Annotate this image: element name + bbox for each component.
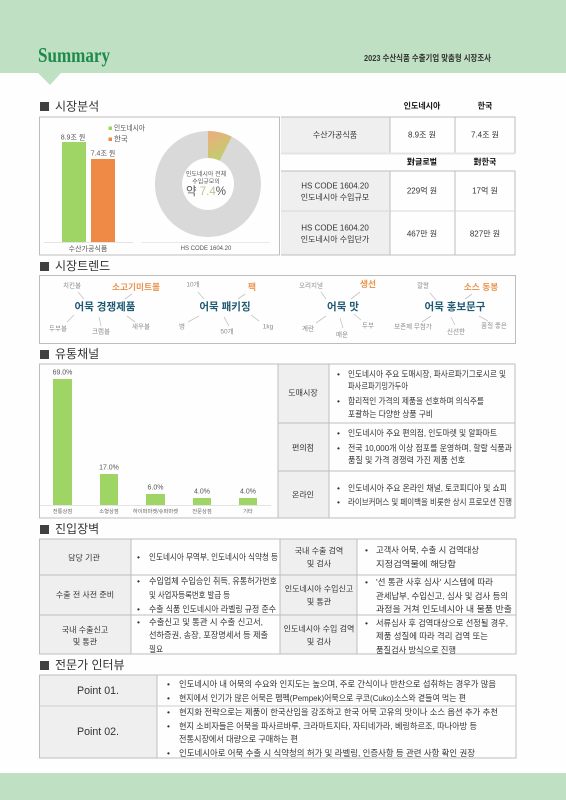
- table: market size: 對한국: [474, 156, 497, 166]
- table: entry barriers: 및 검사: [307, 558, 332, 568]
- table: expert interview: •: [167, 721, 170, 731]
- table: expert interview: [40, 675, 516, 758]
- heading: expert interview: 전문가 인터뷰: [55, 658, 125, 672]
- table: market size: 8.9조 원: [408, 130, 436, 140]
- table: entry barriers: 제품 성질에 따라 격리 검역 또는: [376, 631, 488, 641]
- table: entry barriers: •: [137, 617, 140, 627]
- bar chart: distribution channels: 전문상점: [192, 507, 212, 515]
- table: market size: HS CODE 1604.20: [301, 182, 369, 190]
- table: entry barriers: 및 통관: [73, 636, 98, 646]
- table: entry barriers: 인도네시아 수입신고: [285, 584, 353, 594]
- keyword cluster: taste: [299, 278, 376, 338]
- table: distribution channels: 라이브커머스 및 페이백을 비롯한 상시 프로모션 진행: [348, 497, 512, 507]
- table: market size: 827만 원: [470, 230, 500, 238]
- keyword cluster: promotion phrases: 할랄: [417, 280, 429, 290]
- legend: [108, 122, 145, 144]
- keyword cluster: promotion phrases: 신선한: [447, 326, 465, 336]
- donut chart: 인도네시아 전체: [186, 170, 226, 178]
- table: expert interview: 현지 소비자들은 어묵을 파사르바루, 크라마트지타, 자티네가라, 베링하르조, 따나아방 등: [179, 721, 477, 731]
- table: market size: 한국: [478, 100, 493, 110]
- table: market size: [281, 100, 515, 255]
- table: distribution channels: 품질 및 가격 경쟁력 가진 제품 선호: [348, 455, 465, 465]
- table: market size: 7.4조 원: [471, 130, 499, 140]
- table: entry barriers: 및 사업자등록번호 발급 등: [149, 590, 230, 600]
- table: expert interview: 인도네시아 내 어묵의 수요와 인지도는 높으며, 주로 간식이나 반찬으로 섭취하는 경우가 많음: [179, 679, 496, 689]
- panel: market size charts: [40, 117, 280, 255]
- bar chart: distribution channels: 하이퍼마켓/슈퍼마켓: [133, 507, 178, 515]
- table: entry barriers: '선 통관 사후 심사' 시스템에 따라: [376, 577, 493, 587]
- table: market size: 對글로벌: [407, 156, 437, 166]
- legend: 한국: [114, 134, 128, 144]
- table: distribution channels: 인도네시아 주요 온라인 채널, 토코피디아 및 쇼피: [348, 483, 507, 493]
- table: distribution channels: 전국 10,000개 이상 점포를 운영하며, 할랄 식품과: [348, 443, 512, 453]
- table: distribution channels: 포괄하는 다양한 상품 구비: [348, 409, 433, 419]
- keyword cluster: competing products: 두부볼: [49, 324, 67, 332]
- legend: 인도네시아: [114, 122, 145, 132]
- table: distribution channels: 인도네시아 주요 도매시장, 파사르파기그로시르 및: [348, 369, 506, 379]
- table: market size: 인도네시아 수입단가: [301, 234, 370, 244]
- table: entry barriers: •: [365, 618, 368, 628]
- table: market size: 17억 원: [472, 186, 498, 196]
- keyword cluster: promotion phrases: 품질 좋은: [481, 322, 507, 330]
- keyword cluster: competing products: 어묵 경쟁제품: [75, 300, 136, 313]
- table: distribution channels: •: [337, 443, 340, 453]
- table: distribution channels: 온라인: [292, 490, 314, 500]
- table: market size: 229억 원: [407, 186, 437, 196]
- table: entry barriers: [40, 539, 516, 655]
- table: entry barriers: •: [137, 604, 140, 614]
- table: entry barriers: •: [365, 545, 368, 555]
- table: entry barriers: 필요: [149, 644, 163, 654]
- table: expert interview: Point 02.: [77, 726, 119, 738]
- keyword cluster: taste: 오리지널: [299, 280, 323, 290]
- donut chart: 약 7.4%: [186, 184, 226, 198]
- table: entry barriers: 과정을 거쳐 인도네시아 내 물품 반출: [376, 604, 512, 614]
- bar chart: distribution channels: 4.0%: [240, 488, 256, 496]
- table: market size: 인도네시아 수입규모: [301, 192, 369, 202]
- header band: [0, 0, 566, 85]
- bar chart: processed seafood: 수산가공식품: [69, 244, 108, 253]
- keyword cluster: packaging: 50개: [220, 326, 234, 336]
- table: market size: HS CODE 1604.20: [301, 224, 369, 232]
- keyword cluster: taste: 생선: [360, 278, 376, 289]
- bar chart: processed seafood: 8.9조 원: [61, 132, 85, 142]
- bar chart: distribution channels: 4.0%: [194, 488, 210, 496]
- keyword cluster: packaging: 10개: [186, 280, 200, 288]
- title: Summary: [38, 43, 110, 67]
- table: entry barriers: •: [137, 552, 140, 562]
- table: entry barriers: 지정검역물에 해당함: [376, 559, 456, 569]
- heading: market trends: 시장트렌드: [55, 259, 110, 273]
- keyword cluster: competing products: [49, 280, 160, 336]
- bar chart: distribution channels: 6.0%: [148, 484, 163, 492]
- table: entry barriers: 수출 전 사전 준비: [56, 590, 114, 600]
- table: expert interview: Point 01.: [77, 685, 119, 697]
- table: entry barriers: 국내 수출 검역: [295, 546, 343, 556]
- keyword cluster: promotion phrases: [394, 280, 507, 336]
- table: expert interview: •: [167, 679, 170, 689]
- keyword cluster: competing products: 치킨볼: [63, 280, 81, 290]
- table: expert interview: 현지화 전략으로는 제품이 한국산임을 강조하고 한국 어묵 고유의 맛이나 소스 옵션 추가 추천: [179, 707, 498, 717]
- table: entry barriers: 및 통관: [307, 596, 332, 606]
- donut chart: HS CODE 1604.20: [181, 246, 232, 252]
- heading: market analysis: 시장분석: [55, 100, 99, 114]
- table: distribution channels: 편의점: [292, 442, 314, 452]
- table: expert interview: 현지에서 인기가 많은 어묵은 펨펙(Pempek)어묵으로 쿠코(Cuko)소스와 곁들여 먹는 편: [179, 693, 466, 703]
- bar chart: processed seafood: 7.4조 원: [91, 148, 115, 158]
- footer band: [0, 773, 566, 800]
- table: distribution channels: [278, 364, 515, 518]
- table: market size: 467만 원: [407, 230, 437, 238]
- table: entry barriers: 수입업체 수입승인 취득, 유통허가번호: [149, 576, 277, 586]
- bar chart: distribution channels: 소형상점: [99, 507, 119, 515]
- keyword cluster: competing products: 소고기미트볼: [112, 281, 160, 292]
- bar chart: distribution channels: 69.0%: [53, 370, 72, 376]
- table: distribution channels: •: [337, 497, 340, 507]
- table: distribution channels: •: [337, 483, 340, 493]
- table: expert interview: 전통시장에서 대량으로 구매하는 편: [179, 734, 298, 744]
- table: entry barriers: •: [365, 577, 368, 587]
- panel: market trends: [40, 276, 516, 344]
- donut chart: [141, 131, 270, 252]
- table: distribution channels: •: [337, 428, 340, 438]
- table: distribution channels: 도매시장: [288, 388, 318, 398]
- table: distribution channels: 파사르파기밍가두아: [348, 381, 408, 391]
- table: distribution channels: •: [337, 396, 340, 406]
- table: entry barriers: 선하증권, 송장, 포장명세서 등 제출: [149, 630, 268, 640]
- keyword cluster: packaging: 병: [179, 322, 185, 330]
- bar chart: distribution channels: [40, 364, 278, 518]
- table: entry barriers: 수출신고 및 통관 시 수출 신고서,: [149, 617, 263, 627]
- keyword cluster: taste: 계란: [302, 324, 314, 332]
- table: distribution channels: 인도네시아 주요 편의점, 인도마렛 및 알파마트: [348, 428, 497, 438]
- table: entry barriers: 관세납부, 수입신고, 심사 및 검사 등의: [376, 591, 508, 601]
- table: entry barriers: 국내 수출신고: [62, 624, 108, 634]
- table: expert interview: •: [167, 707, 170, 717]
- keyword cluster: packaging: [179, 280, 274, 336]
- keyword cluster: promotion phrases: 보존제 무첨가: [394, 322, 432, 330]
- table: entry barriers: •: [137, 576, 140, 586]
- table: entry barriers: 수출 식품 인도네시아 라벨링 규정 준수: [149, 604, 276, 614]
- bar chart: distribution channels: 기타: [243, 507, 253, 515]
- table: entry barriers: 인도네시아 수입 검역: [284, 624, 354, 634]
- table: distribution channels: •: [337, 369, 340, 379]
- keyword cluster: competing products: 크랩볼: [92, 326, 110, 336]
- keyword cluster: packaging: 어묵 패키징: [199, 300, 251, 313]
- keyword cluster: competing products: 새우볼: [132, 322, 150, 330]
- table: distribution channels: 합리적인 가격의 제품을 선호하며 의식주를: [348, 396, 484, 406]
- keyword cluster: promotion phrases: 소스 동봉: [464, 282, 498, 292]
- table: market size: 수산가공식품: [313, 130, 357, 140]
- table: entry barriers: 품질검사 방식으로 진행: [376, 645, 456, 655]
- table: entry barriers: 담당 기관: [68, 552, 100, 562]
- table: entry barriers: 서류심사 후 검역대상으로 선정될 경우,: [376, 618, 508, 628]
- table: entry barriers: 및 검사: [307, 636, 332, 646]
- heading: distribution channels: 유통채널: [55, 347, 99, 361]
- bar chart: distribution channels: 전통상점: [53, 507, 72, 515]
- table: expert interview: 인도네시아로 어묵 수출 시 식약청의 허가 및 라벨링, 인증사항 등 관련 사항 확인 권장: [179, 748, 475, 758]
- donut chart: 수입규모의: [192, 178, 220, 186]
- keyword cluster: taste: 매운: [336, 330, 348, 338]
- keyword cluster: promotion phrases: 어묵 홍보문구: [425, 300, 486, 313]
- table: market size: 인도네시아: [404, 100, 441, 110]
- keyword cluster: taste: 어묵 맛: [327, 300, 359, 313]
- table: expert interview: •: [167, 693, 170, 703]
- keyword cluster: packaging: 1kg: [263, 324, 274, 330]
- table: entry barriers: 고객사 어묵, 수출 시 검역대상: [376, 545, 479, 555]
- keyword cluster: packaging: 팩: [248, 281, 256, 292]
- heading: entry barriers: 진입장벽: [55, 522, 99, 536]
- bar chart: processed seafood: [44, 132, 133, 253]
- table: entry barriers: 인도네시아 무역부, 인도네시아 식약청 등: [149, 552, 278, 562]
- bar chart: distribution channels: 17.0%: [99, 464, 119, 472]
- table: expert interview: •: [167, 748, 170, 758]
- report name: 2023 수산식품 수출기업 맞춤형 시장조사: [364, 53, 491, 63]
- keyword cluster: taste: 두부: [362, 322, 374, 330]
